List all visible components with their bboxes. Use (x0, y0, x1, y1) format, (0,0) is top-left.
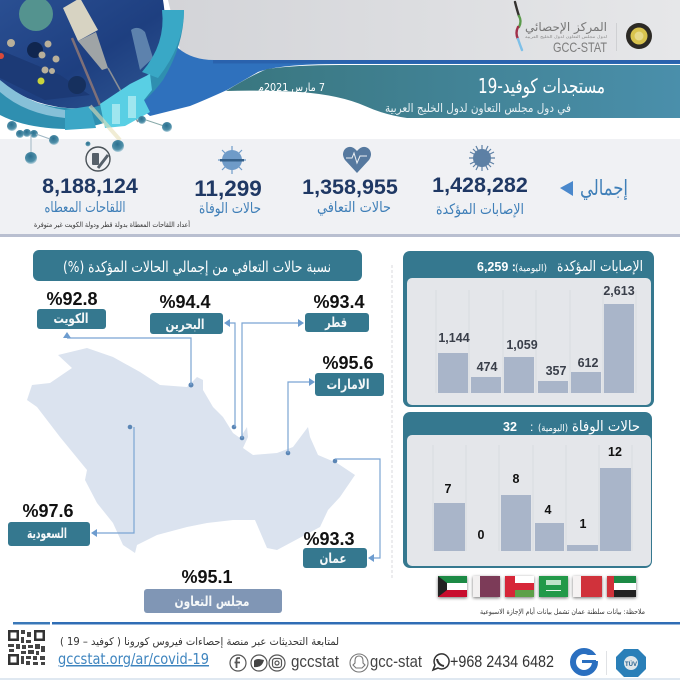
hero photo circle (0, 0, 184, 164)
footer: +968 2434 6482 (450, 653, 554, 671)
callout: Kuwait: الكويت (54, 311, 88, 327)
connector: Qatar (240, 319, 304, 440)
bar chart: 2,613 (603, 284, 635, 298)
stat: vaccines: 8,188,124 (42, 174, 138, 198)
map section header: نسبة حالات التعافي من إجمالي الحالات المؤكدة (%) (63, 258, 331, 277)
date: 7 مارس 2021م (258, 81, 325, 94)
callout: Bahrain: البحرين (166, 317, 204, 333)
callout: Qatar: قطر (324, 315, 347, 331)
flag: Bahrain (573, 576, 602, 597)
panel: daily deaths (403, 412, 652, 568)
callout: UAE (315, 353, 384, 396)
virus (19, 0, 53, 31)
bar chart: 1,059 (506, 338, 538, 352)
flag: UAE (607, 576, 636, 597)
QR code (8, 630, 45, 665)
bar chart: 8 (513, 472, 520, 486)
gloved hand (100, 74, 152, 128)
bar chart: 1 (580, 517, 587, 531)
GCC-STAT logo (515, 2, 652, 55)
connector: Oman (333, 459, 380, 562)
footer (0, 622, 680, 680)
stat: recovered: 1,358,955 (302, 175, 398, 199)
callout: Qatar (305, 292, 369, 332)
callout: Kuwait: %92.8 (46, 289, 98, 309)
GCC map (27, 348, 355, 553)
panel heading: الإصابات المؤكدة (557, 259, 643, 275)
molecules (7, 39, 60, 74)
bar chart: 1,144 (438, 331, 470, 345)
panel heading: : (530, 420, 533, 434)
GCC emblem (626, 23, 652, 49)
TUV logo: TÜV (625, 661, 637, 668)
panel heading: 6,259 : (477, 260, 516, 274)
flags (438, 576, 636, 597)
icon: flat virus (218, 146, 246, 174)
bar chart: 4 (545, 503, 552, 517)
logo ribbon (515, 2, 522, 50)
TUV logo (616, 649, 646, 677)
stat: confirmed (432, 145, 528, 218)
bar chart: 0 (478, 528, 485, 542)
subtitle: في دول مجلس التعاون لدول الخليج العربية (385, 101, 571, 116)
test tube (131, 28, 153, 70)
callout: GCC: %95.1 (181, 567, 233, 587)
footer: gcc-stat (370, 653, 422, 671)
bar chart (438, 284, 635, 393)
flag: Kuwait (438, 576, 467, 597)
flag: Saudi (539, 576, 568, 597)
panel: daily confirmed (403, 251, 654, 407)
connector: Bahrain (224, 319, 236, 429)
callout: Oman: عمان (320, 551, 346, 567)
bar chart: 7 (445, 482, 452, 496)
callout: GCC (144, 567, 282, 613)
bar chart: 612 (578, 356, 598, 370)
syringe (63, 0, 138, 122)
icon: heart (343, 147, 371, 173)
whatsapp icon (433, 654, 449, 670)
social icons (230, 655, 285, 671)
callout: Bahrain (150, 292, 223, 334)
stats strip (0, 139, 680, 237)
callout: Oman (303, 529, 367, 568)
callout: GCC: مجلس التعاون (174, 594, 250, 610)
logo text: المركز الإحصائي (525, 20, 607, 35)
follow text: لمتابعة التحديثات عبر منصة إحصاءات فيروس كورونا ( كوفيد – 19 ) (60, 636, 339, 648)
panel heading: (اليومية) (538, 423, 568, 434)
icon: virus (469, 145, 495, 171)
bar chart (434, 445, 631, 551)
map section header (33, 250, 362, 281)
callout: Oman: %93.3 (303, 529, 355, 549)
teal ring (0, 10, 184, 129)
bar chart: 12 (608, 445, 622, 459)
connector: Saudi (91, 425, 134, 537)
bar chart: 357 (546, 364, 566, 378)
stat: confirmed: 1,428,282 (432, 173, 528, 197)
connector: UAE (286, 378, 315, 455)
stat: vaccines: أعداد اللقاحات المعطاة بدولة قطر ودولة الكويت غير متوفرة (34, 220, 190, 229)
certification logo (573, 651, 598, 673)
callout: Saudi (8, 501, 90, 546)
GCC-STAT logo: لدول مجلس التعاون لدول الخليج العربية (525, 34, 607, 39)
stat: vaccines: اللقاحات المعطاه (44, 200, 126, 216)
stat: recovered (302, 147, 398, 216)
callout: Kuwait (37, 289, 106, 329)
panel heading: (اليومية) (515, 263, 547, 274)
panel heading (477, 259, 643, 275)
callout: Bahrain: %94.4 (159, 292, 211, 312)
panel heading: 32 (503, 420, 517, 434)
panel heading (503, 419, 640, 435)
stat: confirmed: الإصابات المؤكدة (436, 202, 524, 218)
bar chart: 474 (477, 360, 497, 374)
footnote: ملاحظة: بيانات سلطنة عمان تشمل بيانات أيام الإجازة الاسبوعية (480, 607, 645, 616)
callout: Qatar: %93.4 (313, 292, 365, 312)
callout: Saudi: %97.6 (22, 501, 74, 521)
callout: UAE: الامارات (326, 377, 370, 393)
flag: Oman (505, 576, 534, 597)
total label (560, 176, 628, 201)
callout: UAE: %95.6 (322, 353, 374, 373)
total label: إجمالي (580, 176, 628, 201)
molecule balls (7, 116, 172, 164)
stat: recovered: حالات التعافي (317, 200, 391, 216)
stat: vaccines (34, 147, 190, 229)
snapchat icon (350, 654, 368, 672)
GCC-STAT logo: GCC-STAT (553, 39, 607, 55)
title banner (226, 65, 680, 118)
footer: gccstat (291, 653, 339, 671)
stat: deaths: 11,299 (194, 176, 262, 201)
icon: vaccine (86, 147, 110, 171)
main title: مستجدات كوفيد-19 (478, 74, 605, 98)
panel heading: حالات الوفاة (572, 419, 640, 435)
flag: Qatar (473, 576, 500, 597)
stat: deaths (194, 146, 262, 217)
callout: Saudi: السعودية (27, 526, 67, 542)
stat: deaths: حالات الوفاة (199, 201, 261, 217)
header background (130, 0, 680, 116)
link: gccstat.org/ar/covid-19 (58, 650, 209, 668)
connector: Kuwait (63, 332, 194, 388)
